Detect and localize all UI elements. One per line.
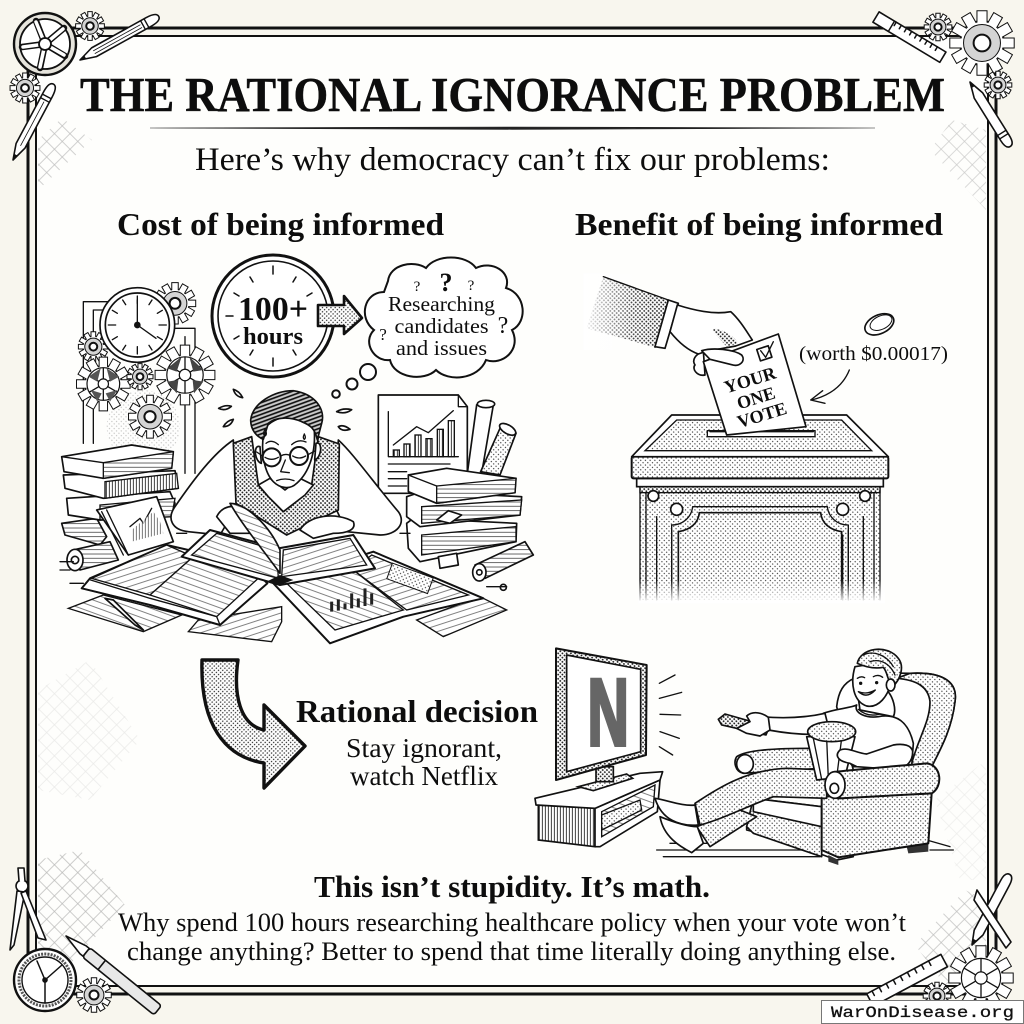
scrolls — [467, 400, 518, 475]
arrow: hours to research — [318, 296, 362, 334]
ballot text: YOUR — [722, 362, 779, 397]
floor lines — [657, 840, 953, 857]
thought cloud: ? — [379, 325, 387, 344]
icon: 100+ hours clock: 100+ — [238, 291, 308, 328]
hand and sleeve — [583, 273, 752, 375]
subtitle: Here’s why democracy can’t fix our problems: — [195, 142, 830, 178]
popcorn bucket — [807, 722, 856, 780]
watermark: WarOnDisease.org — [831, 1004, 1014, 1022]
heading: benefit: Benefit of being informed — [575, 206, 943, 242]
thought cloud: candidates — [394, 314, 488, 338]
thought cloud: and issues — [396, 336, 487, 360]
icon: pencil — [966, 79, 1015, 149]
closing paragraph: Why spend 100 hours researching healthcare policy when your vote won’t — [118, 908, 907, 937]
left scroll — [67, 542, 118, 571]
icon: large gear — [950, 11, 1014, 75]
thought cloud: ? — [440, 268, 452, 297]
icon: compass — [974, 890, 1011, 948]
screen glow rays — [659, 675, 682, 755]
gears and wall clock — [76, 283, 215, 473]
icon: pencil — [968, 872, 1014, 947]
icon: pencil — [78, 12, 161, 64]
hands — [217, 506, 354, 538]
thought cloud — [365, 258, 523, 377]
corner ornaments: bottom right — [867, 872, 1014, 1010]
panel: netflix illustration — [535, 648, 955, 865]
icon: small gear — [923, 982, 951, 1010]
closing paragraph — [118, 908, 907, 966]
loose papers — [68, 595, 507, 642]
icon: side pencil — [9, 82, 58, 162]
corner ornaments: bottom left — [10, 868, 161, 1015]
left book stack — [62, 445, 178, 545]
person — [760, 649, 913, 767]
text: stay ignorant: Stay ignorant, — [346, 733, 502, 763]
icon: side gear — [984, 71, 1012, 99]
thought cloud: ? — [468, 278, 475, 294]
icon: 100+ hours clock: hours — [243, 324, 303, 350]
icon: gear — [77, 978, 111, 1012]
right open book — [273, 552, 483, 643]
closing heading: This isn’t stupidity. It’s math. — [314, 869, 710, 904]
studying scene — [60, 389, 533, 643]
tv set — [556, 648, 647, 791]
chart sheet — [378, 395, 467, 493]
title rule — [150, 127, 875, 129]
ballot text: VOTE — [735, 398, 789, 432]
legs — [655, 768, 827, 853]
tv console — [535, 772, 663, 847]
icon: 100+ hours clock — [212, 255, 334, 377]
icon: wall clock — [100, 288, 175, 362]
corner ornaments: top left — [9, 12, 161, 162]
arm and chair arm — [825, 744, 939, 798]
icon: small gear — [924, 13, 952, 41]
text: stay ignorant: watch Netflix — [350, 761, 498, 791]
text: stay ignorant — [346, 733, 502, 791]
icon: ruler — [867, 954, 947, 1006]
central open book — [182, 503, 375, 585]
thought cloud: ? — [414, 279, 421, 295]
thought cloud: ? — [498, 313, 508, 339]
ballot text: ONE — [734, 383, 778, 413]
hand thumb over ballot — [702, 349, 743, 365]
ballot box — [632, 415, 888, 603]
closing paragraph: change anything? Better to spend that time literally doing anything else. — [127, 937, 896, 966]
icon: pocket clock — [14, 949, 76, 1011]
icon: large spoked gear — [949, 946, 1013, 1010]
remote and hand — [718, 713, 770, 736]
thought cloud: Researching — [388, 292, 496, 316]
armchair — [735, 673, 955, 865]
arrow: to vote — [811, 370, 849, 403]
person — [171, 389, 401, 535]
right scroll — [473, 542, 533, 590]
ballot text — [722, 362, 789, 432]
coin value label: (worth $0.00017) — [799, 343, 948, 365]
panel: benefit illustration — [583, 273, 948, 603]
icon: fountain pen — [62, 931, 161, 1015]
heading: rational decision: Rational decision — [296, 693, 538, 729]
icon: compass — [10, 868, 46, 950]
thought bubbles — [332, 364, 376, 398]
icon: small gear — [76, 12, 104, 40]
icon: spoked wheel — [14, 13, 76, 75]
panel: cost illustration — [60, 255, 533, 643]
title: THE RATIONAL IGNORANCE PROBLEM — [80, 67, 945, 122]
desk lines — [60, 533, 507, 587]
crosshatch corner textures — [38, 118, 986, 985]
left chart book — [97, 497, 173, 555]
corner ornaments: top right — [873, 11, 1015, 149]
watermark — [822, 1000, 1024, 1024]
icon: coin — [861, 309, 897, 339]
ballot — [703, 334, 806, 435]
left open book — [82, 545, 267, 625]
icon: ruler — [873, 12, 946, 62]
arrow: rational decision — [202, 660, 305, 788]
heading: cost: Cost of being informed — [117, 206, 444, 242]
right book stack — [407, 468, 522, 568]
icon: side gear — [10, 73, 40, 103]
netflix logo: N — [588, 659, 629, 766]
